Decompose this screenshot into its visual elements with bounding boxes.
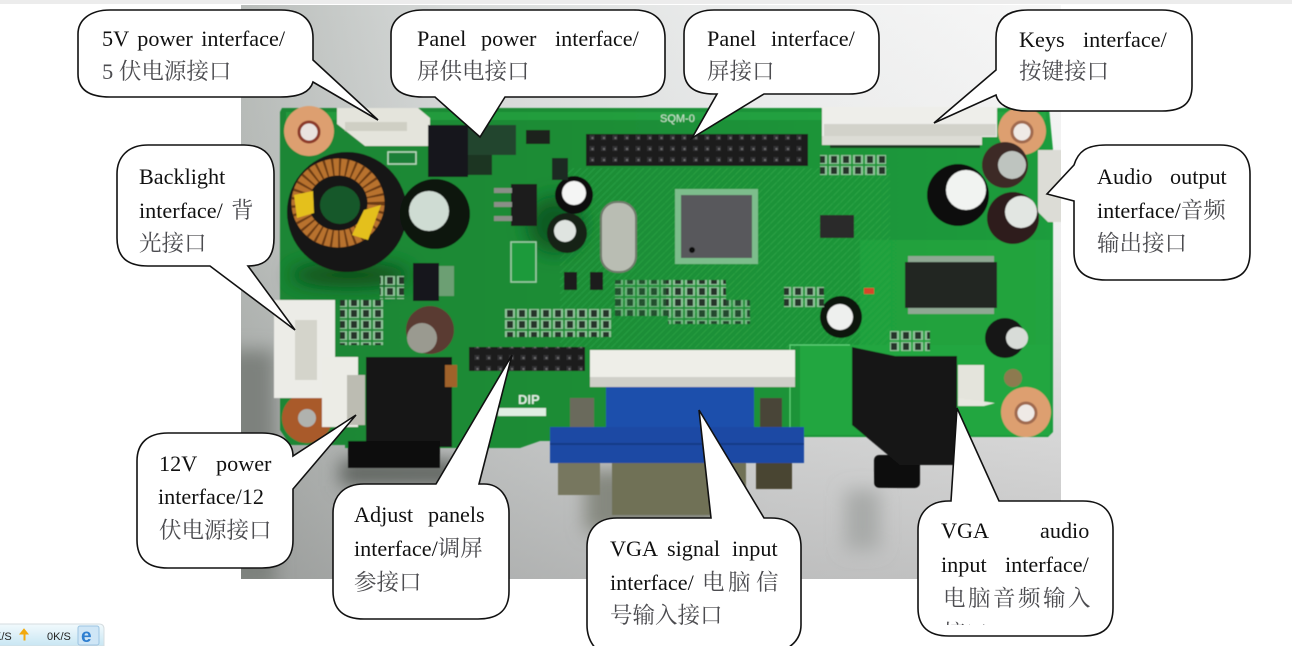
callout: panel interface: 屏接口 (707, 59, 775, 84)
large IC (905, 256, 997, 314)
circuit board (280, 108, 1053, 448)
callout: VGA signal input interface: interface/ (610, 570, 695, 595)
callout: panel interface (684, 10, 879, 138)
pin headers (428, 125, 808, 371)
top connectors (337, 107, 1068, 222)
callout: VGA audio input interface: 脑 (968, 586, 991, 611)
callout: 12V power interface: 12V (159, 451, 197, 476)
callout: audio output interface: interface/音频 (1097, 198, 1226, 223)
callout: panel power interface: Panel (417, 26, 466, 51)
callout: VGA audio input interface: 输 (1043, 586, 1066, 611)
callout: panel power interface (391, 10, 665, 137)
callout: VGA audio input interface (918, 408, 1113, 646)
callout: backlight interface (117, 145, 295, 330)
callout: panel power interface: power (481, 26, 537, 51)
callout: adjust panels interface: panels (428, 502, 485, 527)
callout: 12V power interface: interface/12 (158, 484, 264, 509)
large capacitor (400, 179, 470, 249)
mounting holes (282, 106, 1051, 443)
backlight and 12V connectors (274, 300, 365, 427)
callout: panel power interface: 屏供电接口 (417, 59, 530, 84)
callout: backlight interface: interface/ (139, 198, 224, 223)
callout: adjust panels interface (333, 355, 512, 619)
top window edge (0, 0, 1292, 4)
callout: audio output interface: Audio (1097, 164, 1152, 189)
regulators and discrete parts (413, 130, 874, 301)
callout: 5V power interface: 5 伏电源接口 (102, 59, 231, 84)
callout: keys interface: Keys (1019, 27, 1065, 52)
callout: backlight interface: Backlight (139, 164, 226, 189)
callout: VGA audio input interface: VGA (941, 518, 989, 543)
callout: VGA audio input interface: 电 (943, 586, 966, 611)
callout: VGA audio input interface: input (941, 552, 987, 577)
callout: keys interface (934, 10, 1192, 123)
icon: upload arrow (20, 629, 28, 640)
shadows under connectors (225, 350, 880, 590)
callout: VGA signal input interface (587, 410, 801, 646)
callout: panel interface: interface/ (771, 26, 856, 51)
callout: VGA audio input interface: audio (1040, 518, 1089, 543)
toroid inductor (287, 152, 407, 272)
callout: VGA audio input interface: 入 (1068, 586, 1091, 611)
callout: backlight interface: 背 (231, 198, 254, 223)
callout: VGA signal input interface: 信 (756, 570, 779, 595)
main controller chip (675, 189, 758, 264)
taskbar speed widget: 0K/S (47, 631, 71, 643)
callout: VGA audio input interface: 频 (1018, 586, 1041, 611)
callout: VGA audio input interface: 音 (993, 586, 1016, 611)
callout: VGA audio input interface: 接口 (943, 621, 988, 646)
callout: 12V power interface: power (216, 451, 272, 476)
callout: adjust panels interface: 参接口 (354, 570, 422, 595)
callout: keys interface: interface/ (1083, 27, 1168, 52)
callout: panel interface: Panel (707, 26, 756, 51)
callout: audio output interface: output (1170, 164, 1228, 189)
callout: VGA signal input interface: signal (667, 536, 720, 561)
small capacitors (406, 176, 1028, 358)
dark board shading (290, 197, 583, 287)
DIP marking: DIP (518, 392, 540, 407)
audio capacitors (927, 142, 1039, 244)
callout: 12V power interface (137, 415, 356, 568)
callout: 5V power interface: 5V power interface/ (102, 26, 286, 51)
callout: panel power interface: interface/ (555, 26, 640, 51)
SMD resistor arrays (340, 153, 930, 352)
callout: adjust panels interface: interface/调屏 (354, 536, 483, 561)
callout: audio output interface: 输出接口 (1097, 231, 1187, 256)
callout: VGA signal input interface: VGA (610, 536, 658, 561)
taskbar speed widget (0, 624, 104, 646)
VGA white connector (590, 350, 795, 387)
callout: audio output interface (1047, 145, 1250, 280)
callout: VGA signal input interface: 脑 (728, 570, 751, 595)
callout: VGA signal input interface: 号输入接口 (610, 603, 723, 628)
DIP marking (498, 392, 546, 416)
callout: backlight interface: 光接口 (139, 231, 207, 256)
callout: adjust panels interface: Adjust (354, 502, 414, 527)
callout: VGA signal input interface: 电 (702, 570, 725, 595)
board label: SQM-0 (660, 113, 695, 125)
callout: 5V power interface (78, 10, 378, 120)
audio jack (852, 347, 995, 488)
DC power jack (348, 357, 457, 468)
small IC (820, 215, 854, 238)
VGA connector (550, 387, 804, 515)
callout: 12V power interface: 伏电源接口 (159, 518, 272, 543)
callout: VGA audio input interface: interface/ (1005, 552, 1090, 577)
photo: LCD controller board (225, 5, 1068, 590)
crystal (601, 202, 636, 272)
callout: keys interface: 按键接口 (1019, 59, 1109, 84)
callout: VGA signal input interface: input (732, 536, 778, 561)
